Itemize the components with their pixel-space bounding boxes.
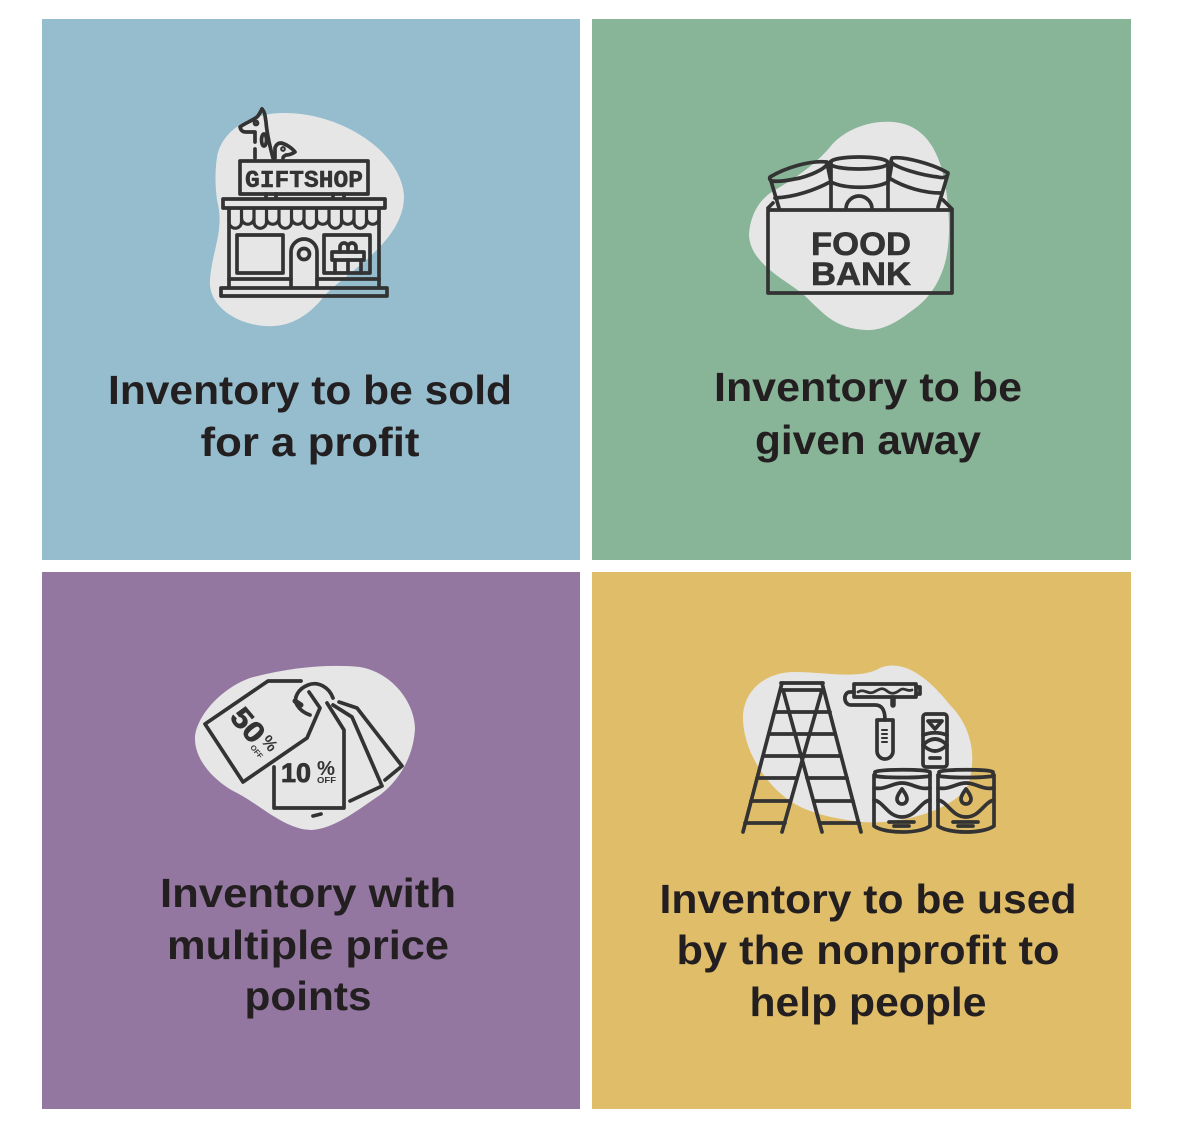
heading: Inventory to be sold: [108, 367, 512, 413]
10% off label: OFF: [317, 775, 336, 785]
10% off label: [281, 758, 336, 788]
icon: food bank box: [749, 122, 952, 330]
panel: inventory with multiple price points: [42, 572, 580, 1109]
heading: [108, 367, 512, 465]
icon: ladder and paint supplies: [743, 666, 994, 832]
10% off label: 10: [281, 758, 311, 788]
50% off label: %: [257, 732, 282, 755]
panel: inventory to be sold for a profit: [42, 19, 580, 560]
panel: inventory to be given away: [592, 19, 1131, 560]
spray can: [923, 714, 947, 767]
heading: [660, 876, 1076, 1025]
icon: gift shop: [210, 109, 404, 326]
heading: given away: [755, 417, 981, 463]
paint roller: [845, 684, 920, 759]
icon: price tags: [195, 666, 415, 830]
heading: Inventory with: [160, 870, 456, 916]
50% off label: OFF: [248, 743, 265, 761]
heading: Inventory to be: [714, 364, 1022, 410]
ladder: [743, 683, 861, 832]
shop sign text: GIFTSHOP: [245, 168, 363, 195]
heading: by the nonprofit to: [676, 927, 1060, 973]
heading: [160, 870, 456, 1019]
panel: inventory to be used by the nonprofit: [592, 572, 1131, 1109]
heading: Inventory to be used: [660, 876, 1076, 922]
50% off label: 50: [223, 702, 271, 750]
box label: [811, 226, 911, 292]
10% off label: %: [317, 758, 335, 780]
box label: BANK: [811, 256, 911, 292]
heading: points: [244, 973, 372, 1019]
50% off label: [223, 702, 282, 763]
heading: multiple price: [167, 922, 449, 968]
paint cans: [874, 770, 994, 832]
heading: help people: [750, 979, 986, 1025]
heading: [714, 364, 1022, 463]
box label: FOOD: [811, 226, 911, 262]
heading: for a profit: [200, 419, 420, 465]
